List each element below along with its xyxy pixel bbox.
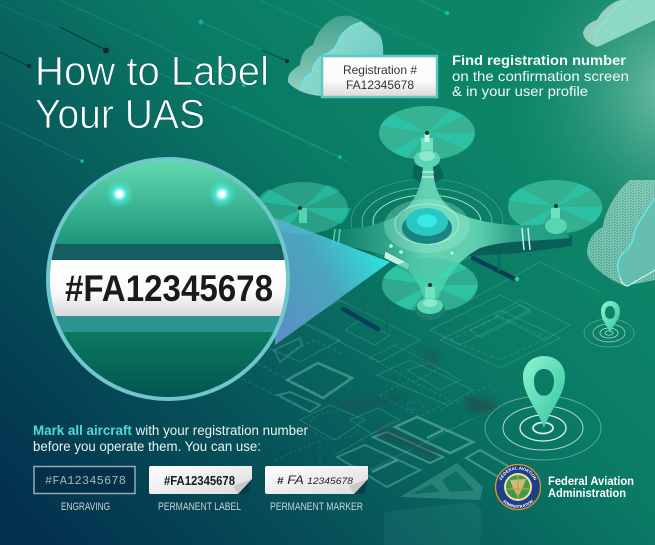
FAA seal: ADMINISTRATION — [502, 500, 534, 508]
option: permanent label: PERMANENT LABEL — [158, 501, 241, 513]
option: permanent label — [149, 466, 252, 513]
cloud: right wireframe — [587, 180, 655, 286]
option: permanent label: #FA12345678 — [164, 474, 235, 488]
FAA name: Federal Aviation — [548, 476, 634, 488]
option: permanent marker: PERMANENT MARKER — [270, 501, 363, 513]
mark all aircraft text — [33, 423, 308, 454]
FAA name: Administration — [548, 488, 626, 500]
map pin: large — [485, 356, 601, 460]
find registration text: & in your user profile — [452, 84, 588, 99]
arm stripes — [333, 172, 530, 250]
option: engraving: #FA12345678 — [45, 474, 126, 488]
drone ground shadow — [340, 348, 495, 456]
registration number large: #FA12345678 — [65, 268, 273, 309]
title: Your UAS — [35, 91, 205, 137]
option: permanent marker — [265, 466, 368, 513]
meteor streaks — [0, 0, 449, 163]
FAA name — [548, 476, 634, 500]
find registration text — [452, 53, 629, 99]
registration box: FA12345678 — [346, 78, 414, 92]
title — [35, 48, 269, 137]
hover rings — [351, 179, 503, 265]
map pin: small — [584, 301, 634, 347]
cloud: top left — [288, 16, 383, 96]
drone arms — [336, 167, 570, 298]
rotor: top — [379, 106, 475, 160]
FAA seal — [494, 464, 542, 510]
magnifier beam — [275, 218, 390, 345]
cloud: top right — [583, 0, 655, 47]
find registration text: on the confirmation screen — [452, 69, 629, 84]
FAA seal: FEDERAL AVIATION — [499, 466, 537, 480]
city blocks — [274, 338, 515, 487]
hub — [384, 199, 470, 270]
city map faint lines — [230, 262, 600, 470]
drone — [256, 106, 603, 332]
registration box: Registration # — [343, 63, 417, 77]
magnifier circle — [40, 155, 300, 404]
landing gear — [343, 250, 519, 332]
registration box — [322, 56, 437, 97]
motor shadow — [340, 165, 572, 256]
find registration text: Find registration number — [452, 53, 627, 68]
title: How to Label — [35, 48, 269, 94]
option: permanent marker: # FA 12345678 — [277, 473, 353, 487]
rotor: bottom — [382, 258, 478, 320]
city blocks lower — [384, 463, 483, 545]
rotor: right — [508, 180, 603, 234]
motors — [414, 131, 567, 234]
mark all aircraft text: before you operate them. You can use: — [33, 439, 261, 454]
rotor: left — [256, 182, 351, 234]
option: engraving — [34, 466, 135, 513]
option: engraving: ENGRAVING — [61, 501, 110, 513]
mark all aircraft text: Mark all aircraft with your registration number — [33, 423, 308, 438]
